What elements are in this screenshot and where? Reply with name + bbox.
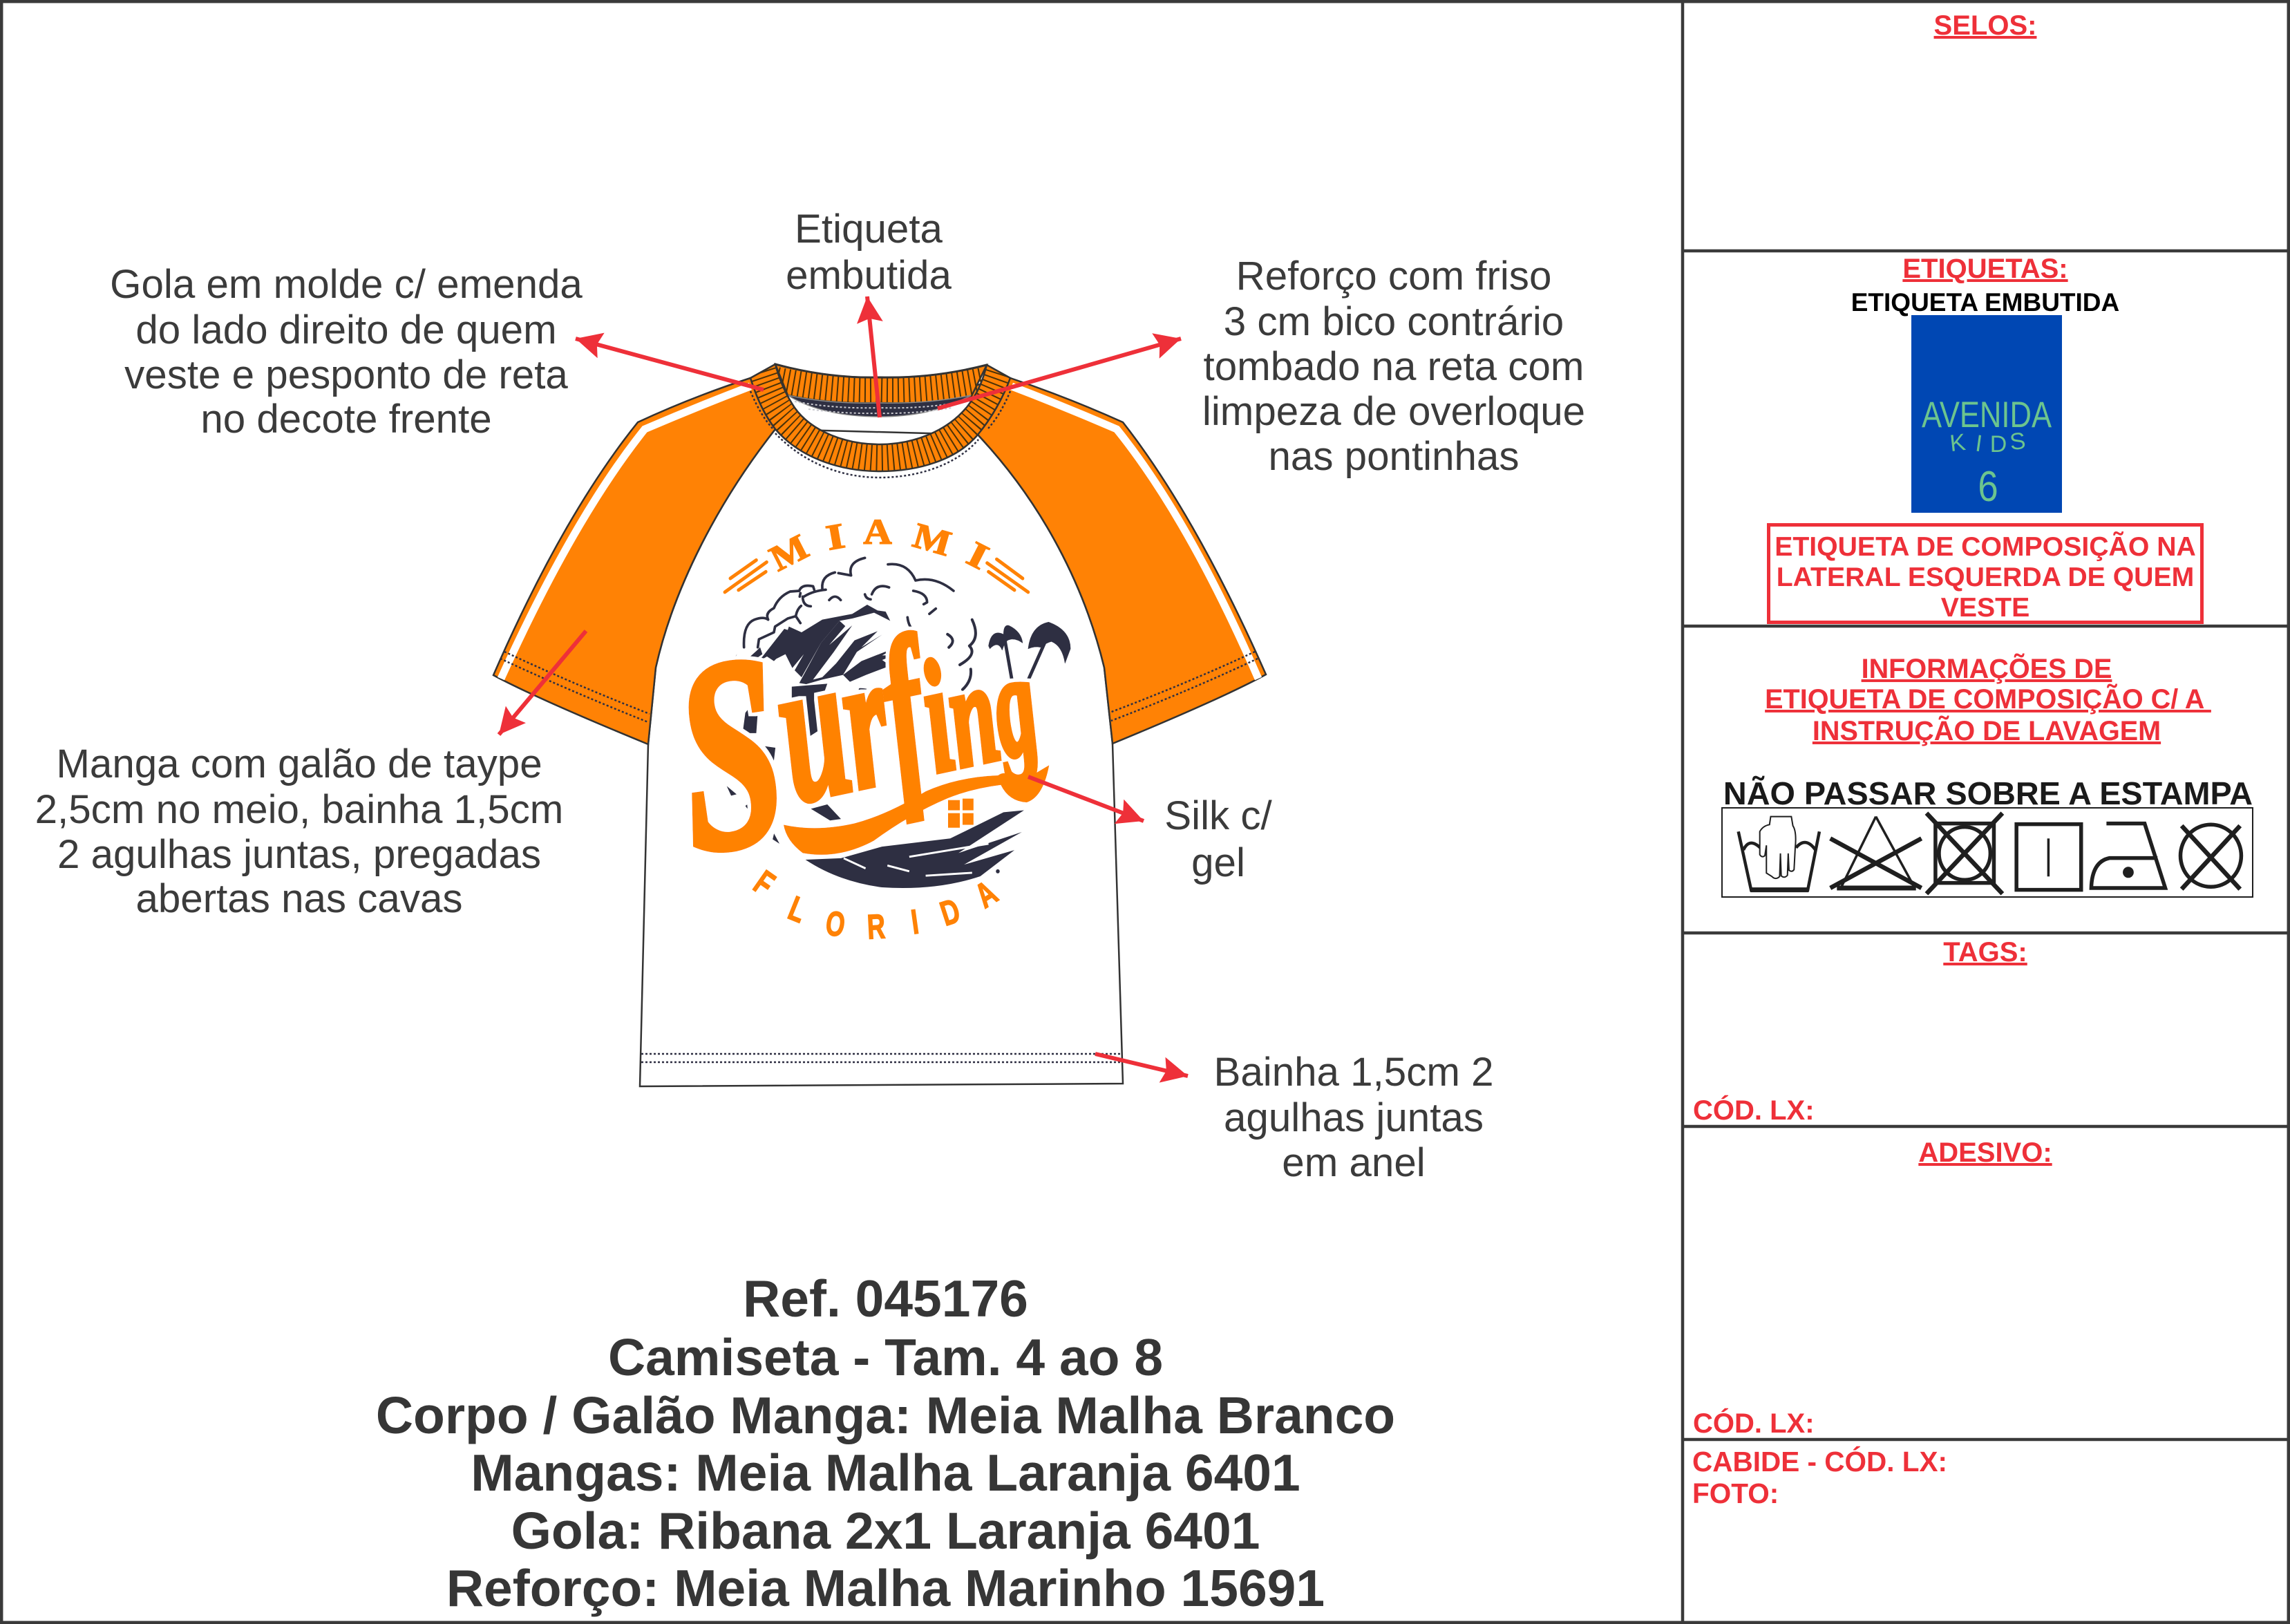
callout: embedded label [786,207,952,298]
panel: selos: SELOS: [1934,10,2036,41]
callout: hem [1213,1050,1494,1185]
panel: cabide: FOTO: [1692,1477,1779,1509]
callout: reinforcement: tombado na reta com [1204,344,1584,389]
callout: collar: veste e pesponto de reta [124,352,568,397]
callout: sleeve: 2,5cm no meio, bainha 1,5cm [35,787,563,832]
hem stitching [641,1054,1122,1062]
product specification title block: Camiseta - Tam. 4 ao 8 [608,1328,1163,1386]
MIAMI arched text: A [863,511,892,551]
Surfing main lettering: urfing [756,567,1053,846]
t-shirt flat sketch [493,364,1266,1086]
left sleeve [493,378,781,744]
callout: embedded label: Etiqueta [795,207,943,252]
FLORIDA arched text: L [783,889,811,931]
information heading: INFORMAÇÕES DE [1862,654,2112,684]
wave white slashes [844,844,989,876]
icon: hand wash [1739,817,1819,890]
callout: sleeve: 2 agulhas juntas, pregadas [57,832,541,877]
callout: silk print [1164,793,1273,885]
callout: reinforcement: nas pontinhas [1268,434,1520,479]
MIAMI arched text: M [764,526,815,579]
callout: reinforcement: limpeza de overloque [1202,389,1585,434]
arrow: sleeve [499,631,586,735]
MIAMI arched text [764,511,995,579]
wave foam outline [744,558,954,648]
callout: collar: do lado direito de quem [135,308,557,352]
shirt body [640,429,1123,1086]
product specification title block: Mangas: Meia Malha Laranja 6401 [471,1444,1300,1502]
etiquetas heading: ETIQUETAS: [1902,254,2068,284]
callout: hem: Bainha 1,5cm 2 [1213,1050,1494,1095]
callout: silk print: gel [1191,840,1245,885]
blue brand label: I [1974,431,1984,457]
blue brand label [1911,315,2062,513]
panel: composition and washing instructions [1722,654,2253,897]
product specification title block: Ref. 045176 [743,1269,1028,1328]
callout: reinforcement [1202,254,1585,479]
panel: adesivo: ADESIVO: [1918,1137,2052,1168]
navy lower wave and inner shading [727,683,1024,888]
product specification title block [376,1269,1395,1617]
front ribbed collar [750,364,1010,471]
surfing print artwork [659,511,1070,947]
FLORIDA arched text: A [969,874,1004,916]
neck topstitching [750,391,1010,478]
panel: adesivo [1693,1137,2052,1439]
FLORIDA arched text: D [936,892,965,934]
care symbols box [1722,808,2253,897]
information heading: INSTRUÇÃO DE LAVAGEM [1813,716,2161,746]
right sleeve [967,378,1266,744]
blue brand label: 6 [1978,463,1998,511]
arrow: reinforcement [938,339,1181,408]
arrow: hem [1095,1054,1188,1076]
callout: collar [110,262,583,442]
composition label note [1769,525,2202,623]
panel: tags: TAGS: [1943,937,2027,967]
FLORIDA arched text: I [909,903,921,942]
icon: no tumble dry [1927,813,2003,894]
embedded label heading: ETIQUETA EMBUTIDA [1851,288,2119,317]
composition label note: ETIQUETA DE COMPOSIÇÃO NA [1775,531,2196,562]
callout: collar: Gola em molde c/ emenda [110,262,583,307]
callout: reinforcement: Reforço com friso [1236,254,1551,299]
arrow: collar [576,339,764,390]
icon: iron [2091,824,2165,888]
callout: reinforcement: 3 cm bico contrário [1224,299,1564,344]
navy neck reinforcement [788,395,971,417]
panel: adesivo: CÓD. LX: [1693,1407,1815,1439]
blue brand label: K [1949,429,1967,457]
callout: collar: no decote frente [200,397,492,442]
navy upper wave [719,605,900,686]
blue brand label: D [1990,431,2007,457]
product specification title block: Gola: Ribana 2x1 Laranja 6401 [511,1502,1260,1560]
icon: no bleach [1830,817,1922,888]
product specification title block: Corpo / Galão Manga: Meia Malha Branco [376,1386,1395,1444]
information heading [1765,654,2211,746]
blue brand label: AVENIDA [1922,395,2052,435]
callout: sleeve: Manga com galão de taype [56,742,542,786]
callout: sleeve [35,742,563,921]
FLORIDA arched text [747,864,1004,947]
panel: tags [1693,937,2027,1126]
warning text: NÃO PASSAR SOBRE A ESTAMPA [1723,775,2253,811]
MIAMI arched text: I [823,516,848,558]
care symbols [1739,813,2241,894]
panel: cabide: CABIDE - CÓD. LX: [1692,1446,1947,1477]
MIAMI arched text: I [961,534,995,578]
FLORIDA arched text: O [823,904,848,945]
blue brand label: S [2009,428,2027,455]
callout: embedded label: embutida [786,253,952,298]
far side foam curls [860,620,976,708]
Surfing main lettering: S [659,598,801,910]
back collar [775,364,987,403]
composition label note: VESTE [1941,593,2029,623]
icon: no dry clean [2180,824,2241,889]
arrow: silk print [1028,777,1144,821]
callout: sleeve: abertas nas cavas [135,876,463,921]
callout: silk print: Silk c/ [1164,793,1273,838]
FLORIDA arched text: F [747,864,781,904]
callout: hem: em anel [1282,1140,1426,1185]
product specification title block: Reforço: Meia Malha Marinho 15691 [446,1559,1325,1617]
icon: line dry [2016,824,2081,890]
callout: hem: agulhas juntas [1224,1095,1484,1140]
palm trees [989,622,1070,687]
small badge under lettering [948,799,974,828]
panel: etiquetas [1769,254,2202,623]
information heading: ETIQUETA DE COMPOSIÇÃO C/ A [1765,684,2211,715]
MIAMI side dashes [725,559,1028,592]
panel: tags: CÓD. LX: [1693,1094,1815,1126]
panel: cabide [1692,1446,1947,1509]
Surfing main lettering [659,567,1053,910]
arrow: embedded label [867,296,880,417]
composition label note: LATERAL ESQUERDA DE QUEM [1777,563,2194,592]
MIAMI arched text: M [909,515,956,564]
FLORIDA arched text: R [867,908,886,947]
